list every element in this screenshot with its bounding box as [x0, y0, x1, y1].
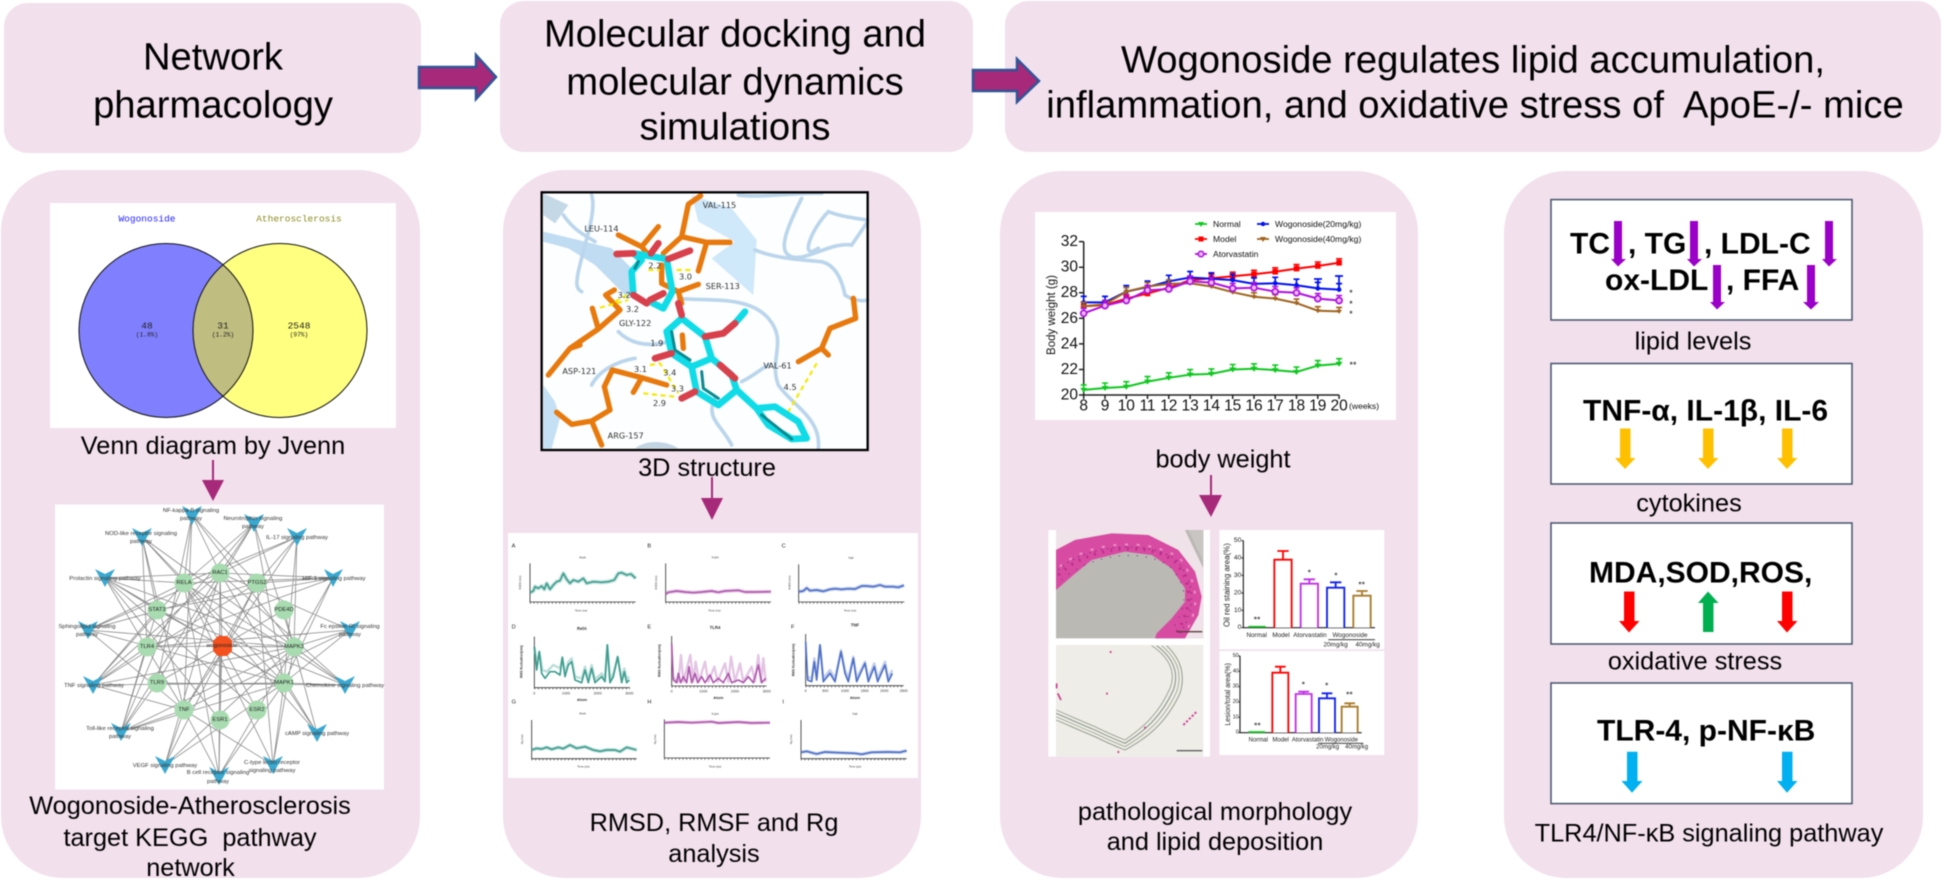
lesion bar chart: Model — [1273, 737, 1289, 743]
header: molecular docking: molecular dynamics — [566, 60, 904, 104]
node labels: Chemokine signaling pathway — [306, 683, 384, 689]
venn diagram: 2548 — [288, 320, 311, 332]
lesion bar chart: Wogonoside — [1325, 737, 1359, 743]
node labels: VEGF signaling pathway — [133, 763, 197, 769]
node labels: Sphingolipid signaling — [58, 624, 116, 630]
blue arrows — [1622, 752, 1798, 793]
chart text: A — [512, 544, 516, 550]
wogonoside hub — [213, 636, 232, 656]
chart text: Rg (nm) — [653, 734, 657, 744]
docking labels: 3.0 — [679, 271, 692, 281]
header: molecular docking: simulations — [639, 106, 831, 148]
protein ribbons — [543, 193, 868, 448]
docking labels: 2.9 — [653, 398, 666, 408]
node labels: pathway — [242, 524, 264, 530]
chart text: 3000 — [625, 691, 633, 695]
venn diagram: 48 — [141, 320, 153, 332]
oil red bar chart: Atorvastatin — [1293, 632, 1327, 639]
chart text: 2000 — [731, 690, 739, 694]
body weight caption: body weight — [1155, 446, 1291, 474]
node labels: MAPK3 — [284, 644, 304, 650]
node labels: MAPK1 — [274, 680, 294, 686]
box: oxidative stress — [1551, 523, 1852, 644]
header: network pharmacology: Network — [143, 36, 284, 78]
docking 3D structure — [542, 192, 868, 450]
body weight line chart: 16 — [1245, 398, 1263, 414]
box: lipid levels: , FFA — [1726, 264, 1799, 297]
header: molecular docking — [500, 1, 973, 152]
docking labels: ASP-121 — [562, 366, 596, 376]
docking labels — [562, 200, 797, 441]
chart text: Rg (nm) — [789, 734, 793, 744]
lesion bar chart — [1219, 651, 1384, 755]
chart text: 500 — [822, 689, 828, 693]
header: network pharmacology — [4, 3, 421, 153]
venn diagram: Atherosclerosis — [256, 214, 342, 224]
lipid caption: lipid levels — [1635, 328, 1751, 356]
significance: ** — [1349, 360, 1357, 370]
lesion bar chart: 40mg/kg — [1345, 745, 1368, 751]
node labels: Prolactin signaling pathway — [69, 576, 141, 582]
node labels: B cell receptor signaling — [187, 770, 249, 776]
body weight line chart: 28 — [1061, 284, 1078, 301]
network caption: Wogonoside-Atherosclerosis — [29, 792, 351, 820]
node labels: PDE4D — [274, 607, 294, 613]
histology images — [1048, 530, 1210, 757]
body weight line chart: 22 — [1061, 361, 1078, 378]
arrow: network to docking — [419, 55, 496, 99]
lesion bar chart: 10 — [1233, 714, 1239, 720]
node labels: Toll-like receptor signaling — [86, 726, 154, 732]
body weight line chart: 9 — [1101, 398, 1109, 414]
docking labels: 3.2 — [626, 304, 639, 314]
network caption — [29, 792, 351, 882]
Rg traces — [532, 722, 907, 754]
docking labels: 1.9 — [650, 338, 663, 348]
red and green arrows — [1619, 592, 1798, 632]
chart text: 2000 — [594, 691, 602, 695]
chart text: TLR4 — [711, 712, 719, 716]
lesion bar chart: 0 — [1236, 730, 1239, 736]
body weight line chart: 17 — [1267, 398, 1284, 414]
docking labels: GLY-122 — [619, 318, 651, 328]
oil red bar chart: 40 — [1234, 554, 1242, 561]
node labels: NF-kappa B signaling — [163, 508, 219, 514]
node labels: pathway — [130, 539, 152, 545]
node labels: pathway — [109, 734, 131, 740]
node labels: pathway — [339, 632, 361, 638]
oil red bar chart: Model — [1272, 632, 1290, 639]
body weight line chart: 10 — [1118, 398, 1135, 414]
oil red bar chart: Normal — [1246, 632, 1267, 639]
header: molecular docking: Molecular docking and — [544, 12, 926, 56]
body weight line chart: 11 — [1139, 398, 1156, 414]
legend: Wogonoside(20mg/kg) — [1275, 219, 1361, 229]
chart text: RMS fluctuation(nm) — [657, 644, 661, 677]
docking labels: 4.5 — [784, 382, 797, 392]
histology and bar figure — [1048, 530, 1384, 757]
box: cytokines: TNF-α, IL-1β, IL-6 — [1583, 394, 1828, 428]
orange residues — [548, 196, 856, 445]
chart text: I — [782, 700, 784, 706]
lesion bar chart: Lesion/total area(%) — [1225, 663, 1232, 726]
body weight line chart: 32 — [1061, 233, 1078, 250]
chart text: RMSD (nm) — [787, 576, 791, 590]
chart text: TNF — [848, 556, 854, 560]
dynamics caption — [590, 809, 838, 868]
chart text: RelA — [579, 711, 586, 715]
docking labels: 3.3 — [671, 383, 684, 393]
oil red bar chart: 20 — [1234, 589, 1242, 596]
lesion bar chart: Atorvastatin — [1292, 737, 1323, 743]
node labels — [58, 508, 384, 785]
chart text: H — [647, 700, 651, 706]
cytokines caption: cytokines — [1636, 490, 1742, 518]
chart text: TNF — [852, 712, 858, 716]
chart text: 1000 — [699, 690, 707, 694]
box: TLR4 pathway: TLR-4, p-NF-κB — [1597, 714, 1815, 748]
chart text: 2000 — [880, 689, 888, 693]
venn diagram: Wogonoside — [118, 214, 176, 224]
node labels: PTGS2 — [247, 580, 267, 586]
RMSD traces — [530, 573, 904, 594]
lesion bar chart: * — [1325, 681, 1329, 691]
chart text: TLR4 — [711, 555, 719, 559]
node labels: RAC1 — [212, 570, 228, 576]
lesion bar chart: 50 — [1233, 653, 1239, 659]
header: network pharmacology: pharmacology — [93, 84, 334, 126]
oxidative caption: oxidative stress — [1608, 648, 1782, 676]
node labels: RELA — [176, 580, 192, 586]
body weight line chart: Body weight (g) — [1046, 275, 1058, 355]
pathology caption: pathological morphology — [1078, 798, 1352, 826]
chart text: 0 — [533, 691, 535, 695]
oil red bar chart: 30 — [1234, 572, 1242, 579]
venn diagram: 31 — [217, 320, 229, 332]
lesion bar chart: ** — [1346, 690, 1353, 700]
node labels: cAMP signaling pathway — [285, 731, 349, 737]
venn diagram: (1.8%) — [136, 332, 158, 338]
lesion bar chart: 20mg/kg — [1316, 745, 1339, 751]
chart text: 0 — [805, 689, 807, 693]
dynamics caption: RMSD, RMSF and Rg — [590, 809, 838, 837]
arrow: weight to pathology — [1199, 475, 1222, 517]
oil red bar chart — [1219, 530, 1384, 649]
chart text: TLR4 — [710, 625, 721, 630]
significance: * — [1349, 309, 1353, 319]
node labels: C-type lectin receptor — [244, 760, 300, 766]
chart text: 1500 — [861, 689, 869, 693]
legend: Atorvastatin — [1213, 249, 1259, 259]
docking labels: 3.1 — [634, 364, 647, 374]
lesion bar chart: 30 — [1233, 684, 1239, 690]
body weight line chart: 20 — [1330, 398, 1348, 414]
HE section — [1056, 645, 1203, 757]
chart text: Time (ps) — [709, 765, 721, 769]
lesion bar chart: ** — [1254, 720, 1261, 730]
chart text: RMSD (nm) — [518, 576, 522, 590]
chart text: C — [782, 544, 786, 550]
oil red bar chart: 10 — [1234, 607, 1242, 614]
chart text: RelA — [577, 626, 588, 631]
venn diagram — [50, 203, 396, 428]
lesion bar chart: 20 — [1233, 699, 1239, 705]
legend: Normal — [1213, 219, 1241, 229]
oil red bar chart: * — [1308, 567, 1312, 577]
RMSF traces — [534, 645, 892, 682]
body weight line chart: 18 — [1288, 398, 1305, 414]
chart text: Rg (nm) — [520, 734, 524, 744]
header: wogonoside regulation: Wogonoside regulates lipid accumulation, — [1121, 38, 1825, 82]
red oxygens — [617, 243, 735, 398]
chart text: RMS fluctuation(nm) — [792, 644, 796, 676]
chart text: Atom — [577, 697, 588, 702]
body weight line chart: 26 — [1061, 310, 1078, 327]
oil red bar chart: 20mg/kg — [1324, 641, 1348, 648]
box: cytokines — [1551, 364, 1852, 484]
pathway caption: TLR4/NF-κB signaling pathway — [1535, 820, 1884, 848]
3D caption: 3D structure — [638, 454, 776, 482]
arrow: docking to mice — [973, 59, 1039, 102]
body weight line chart: 8 — [1079, 398, 1088, 414]
legend: Model — [1213, 234, 1236, 244]
chart text: Time (ns) — [708, 609, 721, 613]
legend — [1195, 219, 1361, 259]
chart text: D — [512, 625, 516, 631]
chart text: E — [647, 625, 651, 631]
chart text — [512, 544, 908, 769]
body weight line chart: (weeks) — [1349, 401, 1379, 411]
dynamics caption: analysis — [668, 840, 760, 868]
venn caption: Venn diagram by Jvenn — [81, 432, 345, 460]
chart text: 2500 — [900, 689, 908, 693]
docking labels: ARG-157 — [608, 431, 644, 441]
panel: in vivo body weight and pathology — [1000, 171, 1418, 878]
body weight line chart: 13 — [1181, 398, 1199, 414]
box: lipid levels: TC — [1570, 228, 1610, 260]
oil red bar chart: 50 — [1234, 537, 1242, 544]
box: lipid levels — [1551, 200, 1852, 320]
chart text: 1000 — [562, 691, 570, 695]
network caption: network — [146, 854, 235, 882]
oil red bar chart: Oil red staining area(%) — [1222, 543, 1231, 627]
docking labels: SER-113 — [706, 281, 740, 291]
header: wogonoside regulation: inflammation, and oxidative stress of ApoE-/- mice — [1046, 84, 1904, 126]
docking labels: VAL-115 — [703, 200, 736, 210]
docking frame — [542, 192, 868, 450]
chart text: TNF — [851, 622, 860, 627]
node labels: TLR4 — [140, 644, 155, 650]
node labels: Neurotrophin signaling — [224, 516, 282, 522]
box: lipid levels: , LDL-C — [1704, 228, 1811, 260]
node labels: ESR2 — [249, 707, 265, 713]
body weight line chart: 20 — [1061, 386, 1078, 404]
body weight line chart: 30 — [1061, 259, 1078, 276]
chart text: Time (ns) — [844, 609, 856, 613]
node labels: pathway — [207, 779, 229, 785]
docking labels: 3.4 — [663, 368, 676, 378]
node labels: HIF-1 signaling pathway — [302, 576, 366, 582]
box: lipid levels: ox-LDL — [1605, 264, 1708, 297]
significance: * — [1349, 288, 1353, 298]
node labels: IL-17 signaling pathway — [266, 535, 328, 541]
significance: * — [1349, 299, 1353, 309]
body weight line chart: 19 — [1309, 398, 1326, 414]
panel: docking and dynamics — [503, 170, 921, 878]
oil red bar chart: ** — [1358, 580, 1366, 590]
error bar accents at week 19 and 20 — [1314, 276, 1343, 289]
lesion bar chart: * — [1302, 680, 1306, 690]
chart text: Atom — [850, 695, 861, 700]
KEGG pathway network — [55, 504, 384, 790]
gene nodes — [138, 564, 304, 730]
chart text: RelA — [579, 555, 586, 559]
docking labels: 2.2 — [648, 261, 661, 271]
venn diagram: (1.2%) — [212, 332, 234, 338]
oil red bar chart: * — [1334, 571, 1338, 581]
box: TLR4 pathway — [1551, 683, 1852, 804]
node labels: pathway — [180, 516, 202, 522]
chart text: 1000 — [841, 689, 849, 693]
chart text: Time (ps) — [577, 765, 590, 769]
network caption: target KEGG pathway — [63, 824, 317, 852]
teal shaded bonds — [635, 262, 792, 439]
yellow contact lines — [600, 270, 817, 412]
panel: network pharmacology — [1, 170, 420, 882]
pathology caption: and lipid deposition — [1107, 828, 1323, 856]
body weight line chart: 14 — [1203, 398, 1220, 414]
body weight line chart — [1035, 212, 1396, 420]
chart text: G — [512, 700, 516, 706]
docking labels: 3.2 — [618, 290, 631, 300]
significance — [1349, 288, 1357, 370]
node labels: ESR1 — [212, 717, 228, 723]
oil red bar chart: 0 — [1238, 624, 1242, 631]
oil red section — [1056, 530, 1203, 638]
legend: Wogonoside(40mg/kg) — [1275, 234, 1361, 244]
docking labels: VAL-61 — [763, 361, 792, 371]
oil red bar chart: 40mg/kg — [1356, 641, 1380, 648]
oil red bar chart: ** — [1254, 615, 1261, 625]
body weight line chart: 12 — [1160, 398, 1177, 414]
node labels: TNF — [178, 707, 190, 713]
RMSD RMSF Rg charts — [508, 533, 918, 778]
cyan ligand — [632, 253, 807, 439]
arrow: venn to network — [202, 460, 224, 501]
node labels: STAT3 — [148, 607, 166, 613]
body weight line chart: 24 — [1061, 335, 1078, 352]
node labels: NOD-like receptor signaling — [105, 531, 177, 537]
header: wogonoside regulation — [1005, 1, 1941, 152]
lesion bar chart: Normal — [1249, 737, 1268, 743]
chart text: RMS fluctuation(nm) — [520, 645, 524, 678]
node labels: wogonoside — [206, 643, 237, 649]
chart text: Time (ns) — [575, 608, 587, 612]
node labels: Fc epsilon RI signaling — [320, 624, 380, 630]
chart text: Time (ps) — [849, 765, 861, 769]
panel: biomarker results — [1504, 171, 1923, 878]
pathology caption — [1078, 798, 1352, 856]
chart text: 0 — [671, 690, 673, 694]
chart text: B — [647, 544, 651, 550]
node labels: pathway — [76, 632, 98, 638]
body weight line chart: 15 — [1224, 398, 1241, 414]
node labels: signaling pathway — [249, 768, 295, 774]
venn diagram: (97%) — [290, 332, 308, 338]
arrow: structure to dynamics — [701, 477, 723, 520]
pathway nodes — [78, 506, 360, 785]
oil red bar chart: Wogonoside — [1332, 632, 1368, 639]
box: lipid levels: , TG — [1628, 228, 1686, 260]
chart text: 3000 — [763, 690, 771, 694]
purple arrows — [1611, 221, 1837, 310]
chart text: Atom — [713, 695, 724, 700]
box: oxidative stress: MDA,SOD,ROS, — [1589, 556, 1812, 590]
docking labels: LEU-114 — [584, 223, 619, 233]
series — [1084, 364, 1339, 390]
node labels: TNF signaling pathway — [64, 683, 124, 689]
chart text: RMSD (nm) — [654, 576, 658, 590]
amber arrows — [1615, 428, 1798, 469]
lesion bar chart: 40 — [1233, 668, 1239, 674]
node labels: TLR9 — [150, 680, 164, 686]
chart text: F — [791, 625, 795, 631]
